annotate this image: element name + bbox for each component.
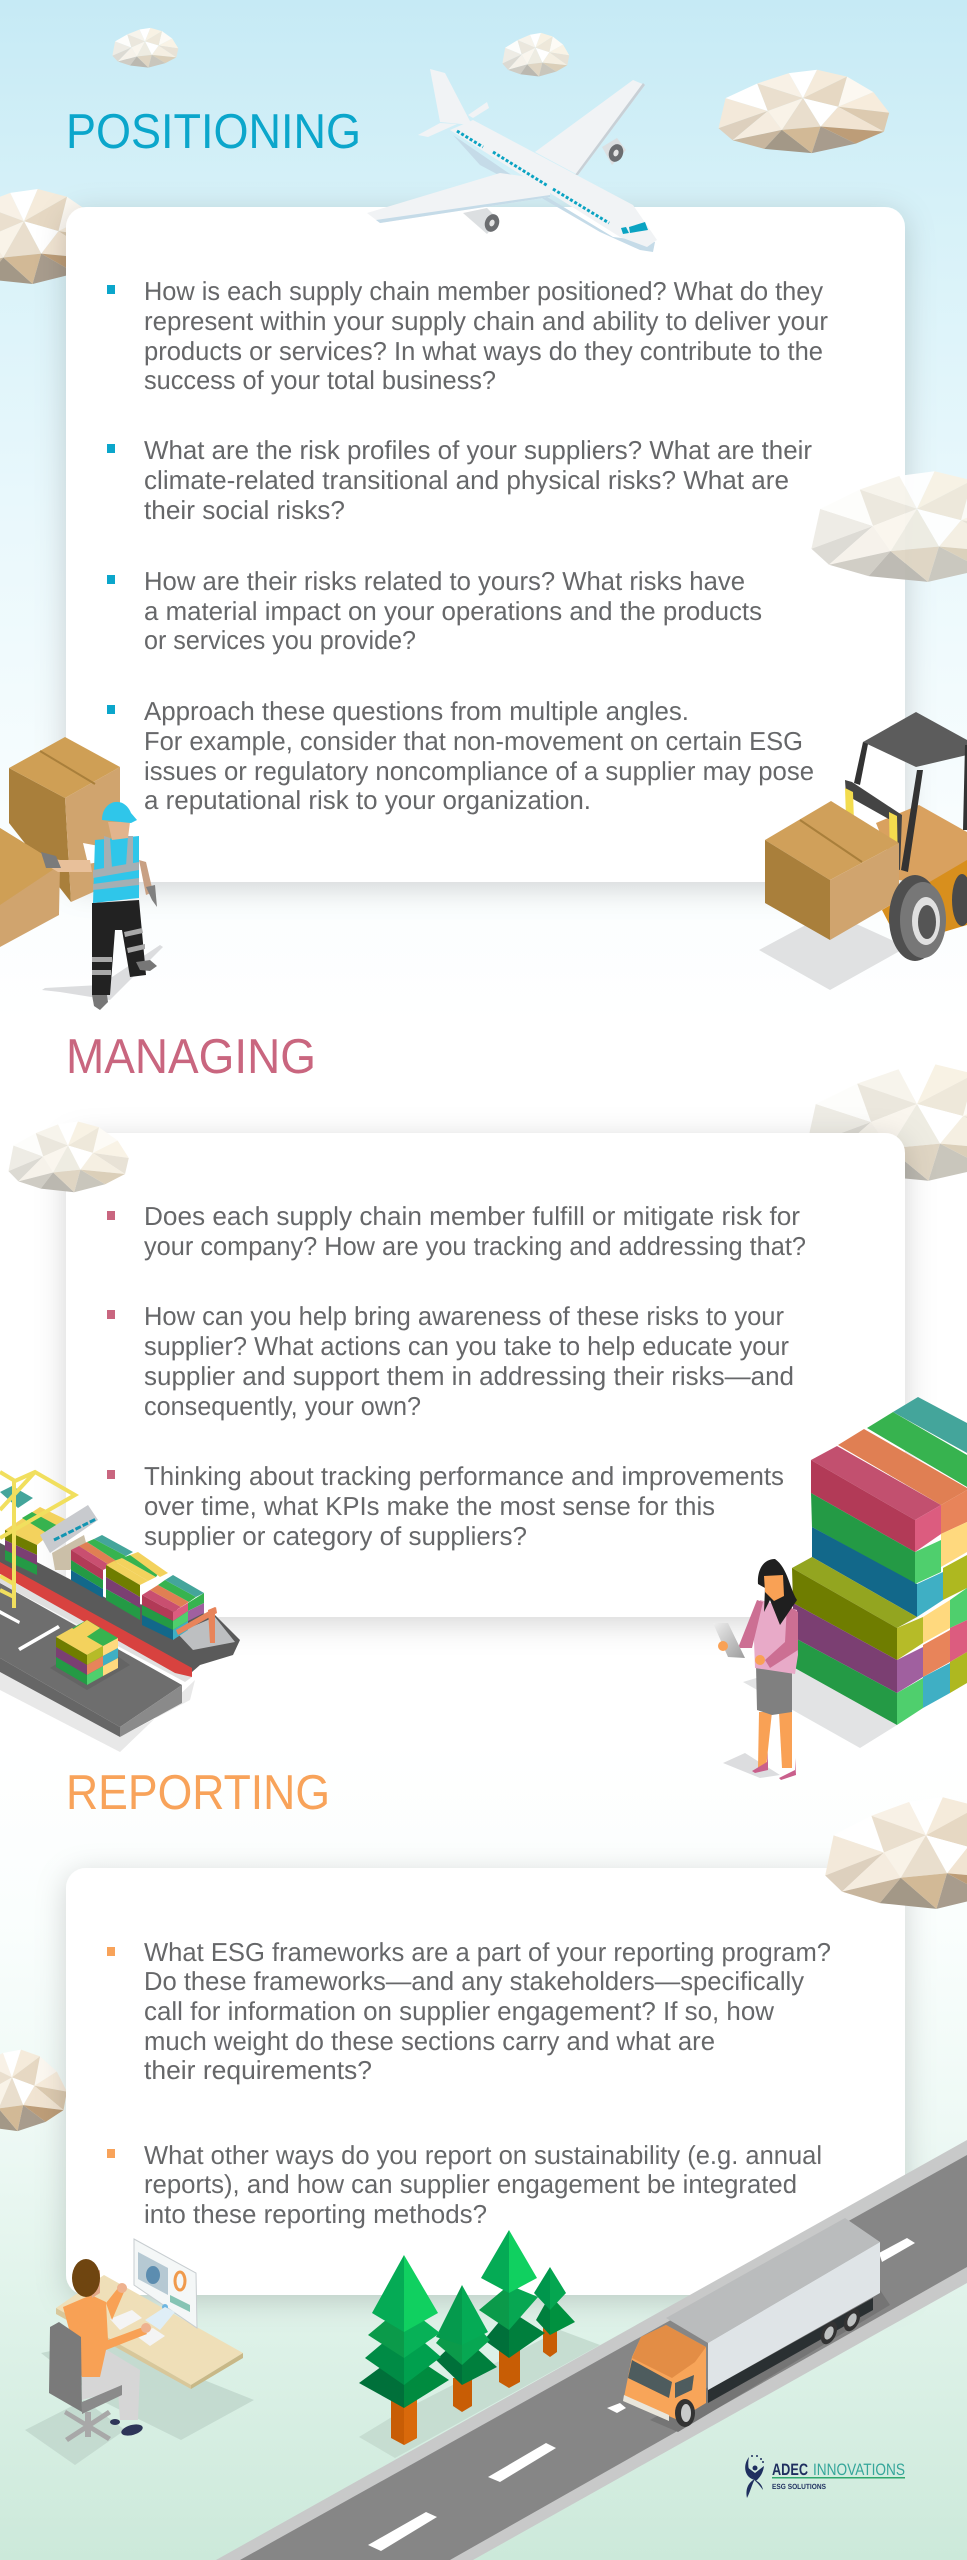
bullet point 2: reports), and how can supplier engagement be integrated [144, 2169, 797, 2199]
lane dash [488, 2443, 556, 2482]
tablet [713, 1623, 745, 1658]
legs and shoes [758, 1712, 772, 1768]
bullet point 1: products or services? In what ways do they contribute to the [144, 336, 823, 366]
illustration: pine trees [359, 2230, 600, 2458]
shadow under worker [42, 945, 163, 1000]
logo: ADEC Innovations ESG Solutions: ESG SOLUTIONS [772, 2482, 826, 2491]
logo: ADEC Innovations ESG Solutions: INNOVATIONS [813, 2461, 905, 2479]
bullet point 2: What are the risk profiles of your suppliers? What are their [144, 435, 812, 465]
illustration: worker with boxes [0, 737, 163, 1010]
cloud: top left [112, 28, 178, 68]
panel: positioning card [66, 207, 905, 882]
illustration: container stack [743, 1397, 967, 1748]
icon: airplane [367, 69, 657, 252]
panel: reporting card [66, 1868, 905, 2295]
logo icon [745, 2455, 764, 2498]
floor shadows [25, 2340, 254, 2465]
desk [56, 2275, 243, 2389]
bullet point 3 [107, 566, 762, 655]
bullet point 2 [107, 1301, 794, 1421]
bullet point 2: What other ways do you report on sustainability (e.g. annual [144, 2140, 822, 2170]
cloud: right over reporting card [825, 1797, 967, 1909]
bullet point 1 [107, 1201, 806, 1261]
lane dash [879, 2238, 915, 2262]
bullet point 2: consequently, your own? [144, 1391, 421, 1421]
yellow port crane [0, 1472, 75, 1608]
body [754, 1600, 798, 1674]
cloud: right over positioning card [811, 471, 967, 582]
illustration: forklift with box [759, 712, 967, 990]
bullet point 3: a material impact on your operations and the products [144, 596, 762, 626]
lane dash [368, 2512, 437, 2551]
illustration: office worker at desk [25, 2239, 254, 2465]
bullet point 1: success of your total business? [144, 365, 496, 395]
lane dash [607, 2403, 626, 2413]
cloud: left behind positioning card [0, 189, 108, 284]
bullet point 4 [107, 696, 814, 815]
bullet point 1: call for information on supplier engagement? If so, how [144, 1996, 774, 2026]
skirt [756, 1665, 792, 1715]
bullet point 3: supplier or category of suppliers? [144, 1521, 527, 1551]
bullet point 2 [107, 435, 812, 525]
cloud: top right [719, 70, 889, 153]
illustration: container ship at port [0, 1472, 240, 1752]
ship crane on bow [176, 1607, 217, 1643]
bullet point 1: Does each supply chain member fulfill or mitigate risk for [144, 1201, 800, 1231]
logo: ADEC Innovations ESG Solutions [745, 2455, 905, 2498]
logo: ADEC Innovations ESG Solutions: ADEC [772, 2461, 808, 2479]
cloud: left over managing card [8, 1121, 129, 1192]
bullet point 3 [107, 1461, 784, 1551]
bullet point 1: What ESG frameworks are a part of your reporting program? [144, 1937, 831, 1967]
cloud: left behind reporting card [0, 2050, 67, 2131]
illustration: woman with tablet [713, 1559, 798, 1780]
rear wheels [818, 2306, 863, 2347]
bullet point 3: or services you provide? [144, 625, 416, 655]
bullet point 1: their requirements? [144, 2055, 372, 2085]
tree middle [436, 2285, 497, 2412]
worker figure [41, 802, 157, 1010]
bullet point 3: How are their risks related to yours? What risks have [144, 566, 745, 596]
bullet point 2: their social risks? [144, 495, 345, 525]
illustration: delivery truck [623, 2218, 890, 2432]
tree far right [534, 2267, 575, 2357]
office chair [49, 2322, 122, 2442]
upper container layers [811, 1397, 967, 1617]
keyboard and papers [110, 2307, 175, 2346]
bullet point 1: much weight do these sections carry and what are [144, 2026, 715, 2056]
box stack [0, 737, 120, 947]
bullet point 1 [107, 1937, 831, 2085]
panel: managing card [66, 1133, 905, 1617]
truck cab [623, 2325, 706, 2427]
containers on dock [50, 1620, 130, 1690]
dock [0, 1575, 192, 1737]
lower container layers [792, 1557, 967, 1725]
bullet point 2: climate-related transitional and physical risks? What are [144, 465, 789, 495]
bullet point 1: represent within your supply chain and ability to deliver your [144, 306, 828, 336]
heading: positioning: POSITIONING [66, 105, 361, 159]
tree front tall [359, 2255, 449, 2445]
bullet point 2 [107, 2140, 822, 2229]
bullet point 2: How can you help bring awareness of these risks to your [144, 1301, 784, 1331]
bullet point 2: supplier and support them in addressing their risks—and [144, 1361, 794, 1391]
bullet point 3: over time, what KPIs make the most sense for this [144, 1491, 715, 1521]
ship hull [0, 1543, 240, 1677]
bullet point 4: issues or regulatory noncompliance of a supplier may pose [144, 756, 814, 786]
bullet point 2: supplier? What actions can you take to help educate your [144, 1331, 789, 1361]
illustration: road [216, 2140, 967, 2560]
bullet point 2: into these reporting methods? [144, 2199, 487, 2229]
bullet point 1: your company? How are you tracking and addressing that? [144, 1231, 806, 1261]
person [63, 2259, 151, 2438]
heading: reporting: REPORTING [66, 1766, 330, 1820]
bullet point 4: For example, consider that non-movement on certain ESG [144, 726, 803, 756]
tree back tall [479, 2230, 545, 2388]
monitor [134, 2239, 197, 2328]
cloud: top centre [502, 33, 569, 77]
bullet point 1: Do these frameworks—and any stakeholders—specifically [144, 1966, 804, 1996]
heading: managing: MANAGING [66, 1030, 316, 1084]
bullet point 3: Thinking about tracking performance and improvements [144, 1461, 784, 1491]
containers on ship [0, 1486, 204, 1640]
bullet point 4: a reputational risk to your organization. [144, 785, 591, 815]
bullet point 1 [107, 276, 828, 395]
bullet point 1: How is each supply chain member positioned? What do they [144, 276, 823, 306]
bullet point 4: Approach these questions from multiple angles. [144, 696, 689, 726]
cloud: right behind managing card [807, 1064, 967, 1181]
head and hair [758, 1559, 797, 1625]
